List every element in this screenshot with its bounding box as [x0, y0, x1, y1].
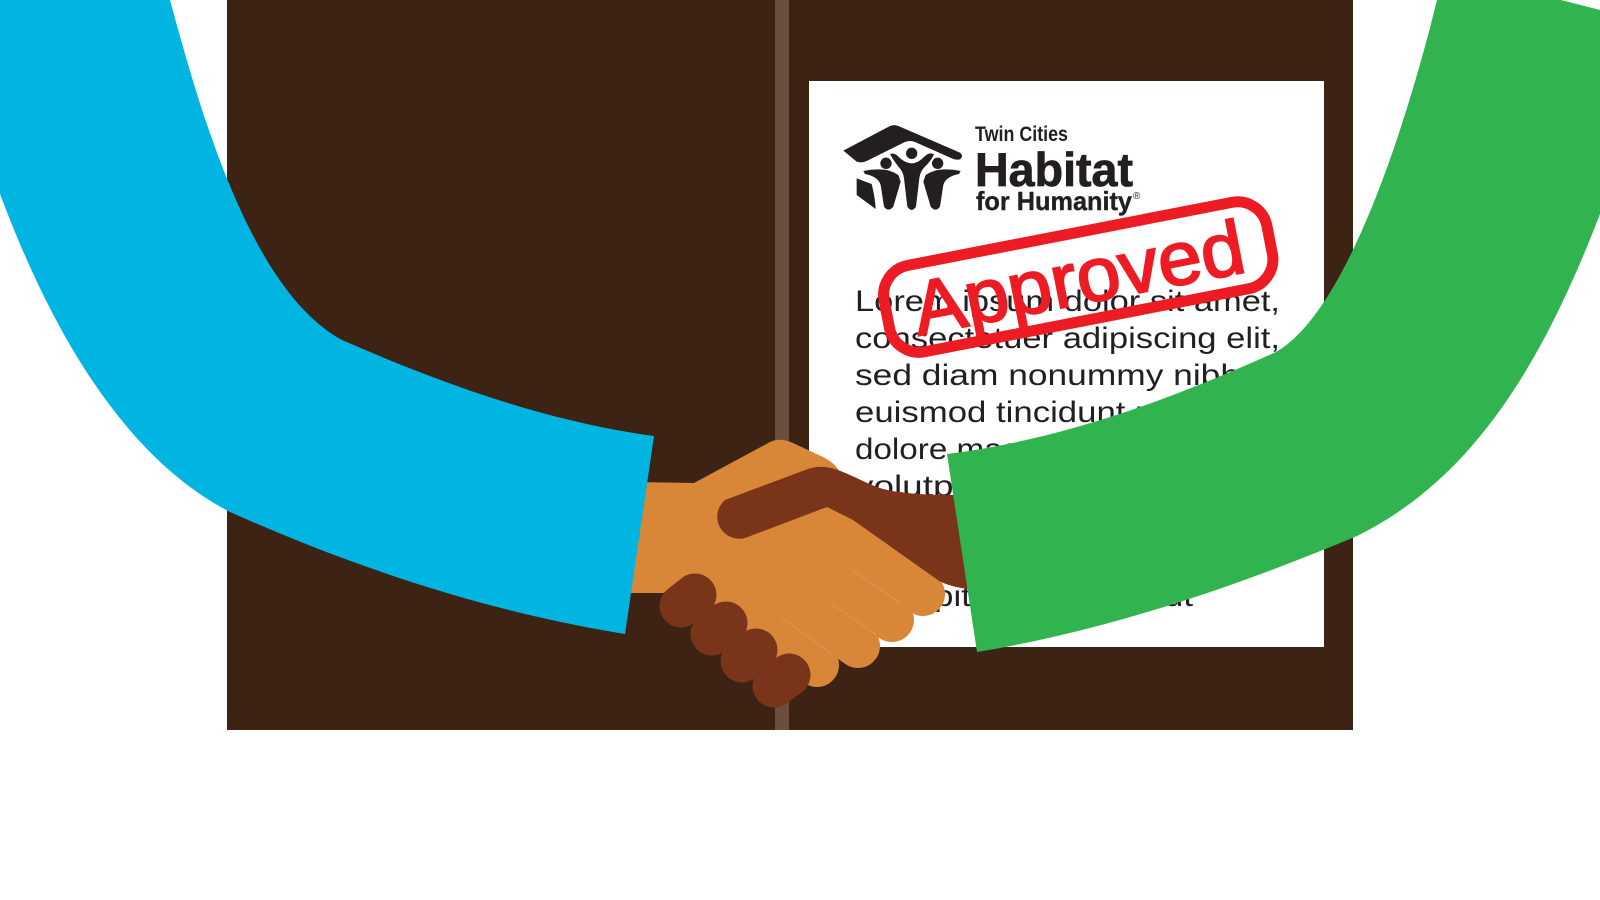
logo: Twin Cities Habitat for Humanity [843, 123, 1141, 216]
text: for Humanity: for Humanity [976, 186, 1133, 216]
text: Twin Cities: Twin Cities [975, 123, 1068, 146]
text block: lorem ipsum body: sed diam nonummy nibh [855, 359, 1240, 392]
panel: brown folder [227, 0, 1353, 730]
text: Habitat: Habitat [975, 143, 1133, 196]
arm: green sleeve [947, 0, 1600, 652]
text block: lorem ipsum body: suscipit lobortis nisl ut [855, 580, 1194, 613]
text block: lorem ipsum body [855, 285, 1281, 613]
text: registered mark: ® [1133, 191, 1141, 202]
text block: lorem ipsum body: volutpat. Ut wisi enim ad [855, 470, 1255, 503]
hand: brown fingers [681, 595, 789, 686]
stamp: Approved: Approved [906, 205, 1252, 352]
text block: lorem ipsum body: Lorem ipsum dolor sit amet, [855, 285, 1280, 318]
hand: brown hand with thumb and arm [717, 467, 975, 590]
text block: lorem ipsum body: euismod tincidunt ut laoreet [855, 396, 1281, 429]
text block: lorem ipsum body: consectetuer adipiscing elit, [855, 322, 1280, 355]
hand: orange hand [625, 440, 923, 665]
panel: white document page [809, 81, 1324, 647]
arm: blue sleeve [0, 0, 654, 634]
icon: house and three figures [843, 125, 962, 210]
text block: lorem ipsum body: dolore magna aliquam erat [855, 433, 1251, 466]
